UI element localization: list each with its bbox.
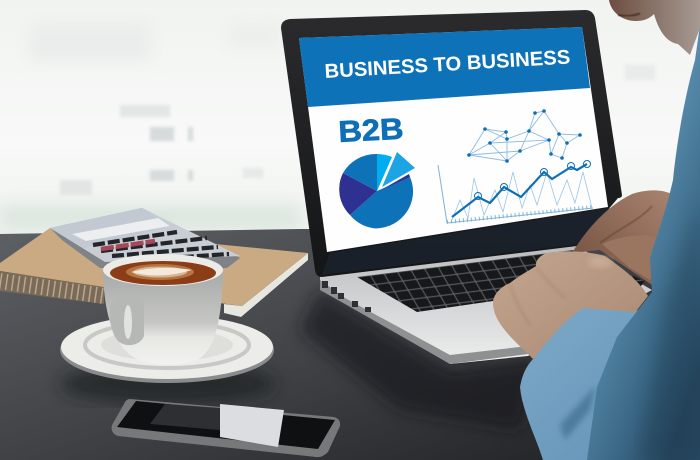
heading: BUSINESS TO BUSINESS: [324, 46, 571, 83]
laptop lid bezel: [281, 10, 622, 277]
network diagram: [467, 109, 582, 163]
far hand on keyboard: [572, 190, 674, 285]
coffee cup: [103, 254, 223, 365]
notebook spiral binding: [0, 271, 104, 304]
cup rim: [103, 254, 223, 286]
laptop shadow on desk: [300, 290, 540, 430]
man's face at top right: [609, 0, 700, 55]
laptop screen: [299, 27, 608, 252]
blue header band: [299, 27, 590, 107]
shirt shadow folds: [560, 200, 700, 460]
calculator: [50, 208, 240, 268]
line chart: [438, 160, 593, 223]
saucer: [60, 315, 274, 383]
bezel bottom reflection: [322, 208, 610, 275]
keyboard: [357, 250, 645, 312]
shirt cuff sleeve: [520, 300, 700, 460]
B2B label: B2B: [338, 113, 404, 149]
shirt body: [587, 25, 700, 460]
notebook: [0, 228, 308, 317]
side ports: [322, 281, 371, 312]
laptop base: [320, 240, 660, 364]
near hand typing: [493, 251, 648, 359]
saucer shadow: [60, 364, 276, 404]
calculator keys: [93, 232, 229, 261]
pie chart: [339, 152, 415, 228]
smartphone: [112, 399, 340, 457]
blurred window background: [0, 0, 700, 240]
coffee with latte art: [110, 261, 216, 285]
desk: [0, 229, 700, 460]
cup handle: [110, 296, 144, 345]
